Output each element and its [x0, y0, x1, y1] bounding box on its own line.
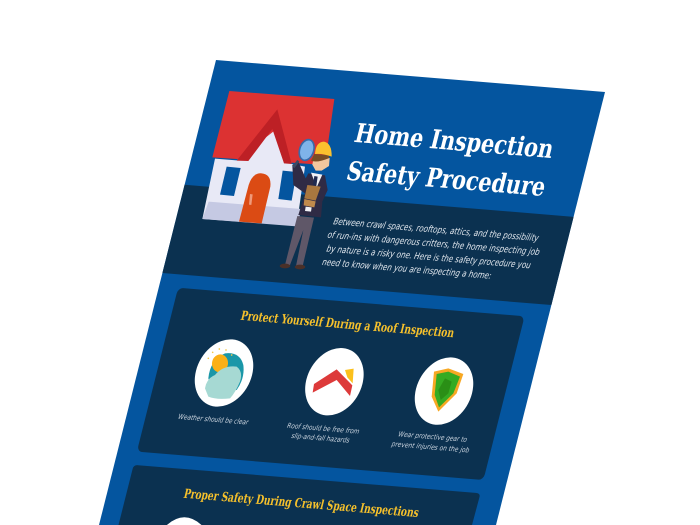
icon: shield — [408, 355, 480, 427]
title — [342, 117, 559, 202]
panel heading: Protect Yourself During a Roof Inspection — [239, 308, 456, 341]
icon: roof — [298, 346, 371, 418]
intro paragraph — [319, 217, 545, 285]
panel heading: Proper Safety During Crawl Space Inspections — [182, 486, 421, 520]
caption: roof: slip-and-fall hazards — [290, 432, 351, 445]
panel: crawl space inspections — [118, 465, 480, 525]
icon: weather — [188, 337, 260, 409]
panel: roof inspection — [137, 288, 525, 480]
intro paragraph: need to know when you are inspecting a home: — [321, 257, 493, 282]
illustration: inspector with magnifying glass — [280, 138, 332, 269]
caption: protective gear: Wear protective gear to — [397, 430, 468, 444]
panel background — [118, 465, 480, 525]
intro paragraph: of run-ins with dangerous critters, the home inspecting job — [326, 230, 541, 258]
caption: protective gear: prevent injuries on the job — [390, 440, 470, 455]
caption: protective gear — [390, 429, 473, 455]
illustration: house — [202, 91, 334, 226]
title: Home Inspection — [352, 117, 558, 164]
blue page background — [99, 60, 605, 525]
caption: weather: Weather should be clear — [177, 412, 251, 427]
caption: roof: Roof should be free from — [286, 421, 360, 436]
intro paragraph: by nature is a risky one. Here is the safety procedure you — [325, 244, 532, 272]
dark intro band — [162, 185, 574, 305]
caption: roof — [284, 421, 360, 445]
intro paragraph: Between crawl spaces, rooftops, attics, and the possibility — [332, 217, 541, 244]
panel background — [137, 288, 525, 480]
icon circle: first crawl space item — [167, 517, 202, 525]
title: Safety Procedure — [344, 155, 549, 202]
